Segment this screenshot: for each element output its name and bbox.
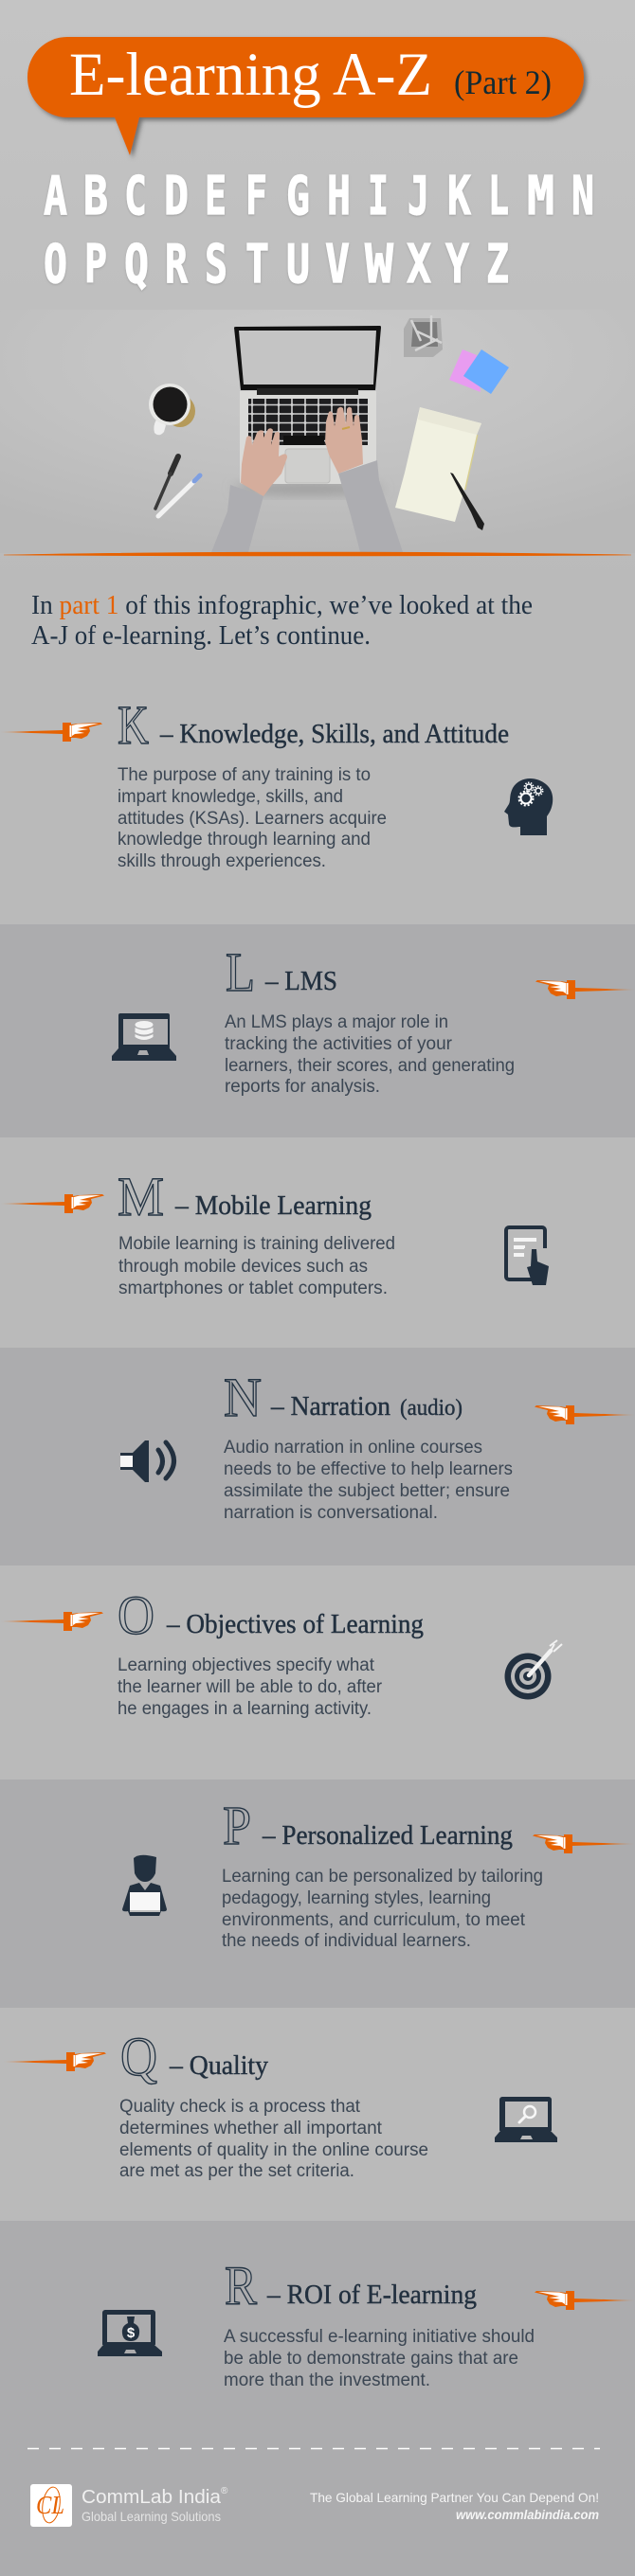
intro text: In part 1 of this infographic, we’ve looked at the xyxy=(31,591,533,620)
alphabet rows: R xyxy=(165,234,188,295)
tagline and url: www.commlabindia.com xyxy=(456,2507,599,2522)
body text: impart knowledge, skills, and xyxy=(118,787,343,807)
company name xyxy=(82,2486,228,2524)
body text xyxy=(118,1655,383,1719)
heading xyxy=(120,2026,268,2087)
body text: Quality check is a process that xyxy=(119,2097,361,2117)
heading xyxy=(118,1166,372,1227)
alphabet rows: M xyxy=(527,166,554,227)
alphabet rows: C xyxy=(124,166,147,227)
heading xyxy=(118,1584,424,1646)
alphabet rows: F xyxy=(245,166,267,227)
tagline and url: The Global Learning Partner You Can Depend On! xyxy=(310,2490,599,2505)
body text: reports for analysis. xyxy=(225,1077,380,1097)
company name: Global Learning Solutions xyxy=(82,2509,221,2524)
alphabet rows: D xyxy=(164,166,189,227)
heading: – ROI of E-learning xyxy=(266,2281,477,2310)
body text: are met as per the set criteria. xyxy=(119,2161,354,2181)
heading xyxy=(225,2255,477,2317)
body text: tracking the activities of your xyxy=(225,1034,453,1054)
heading: – Narration xyxy=(270,1392,390,1422)
page background xyxy=(0,0,635,925)
alphabet rows: A xyxy=(44,166,67,227)
panel: Q Quality xyxy=(0,2008,635,2221)
heading: M xyxy=(118,1166,164,1227)
icon: notepad and pen xyxy=(395,407,484,530)
heading: (audio) xyxy=(400,1396,463,1421)
arrow pointer xyxy=(3,2052,106,2071)
icon: laptop with money bag: $ xyxy=(127,2325,136,2341)
alphabet rows: E xyxy=(205,166,227,227)
arrow pointer xyxy=(0,723,102,742)
panel: N Narration xyxy=(0,1348,635,1565)
heading: L xyxy=(226,941,255,1003)
icon: coffee cup xyxy=(149,384,195,435)
body text: elements of quality in the online course xyxy=(119,2140,428,2160)
logo mark xyxy=(30,2484,72,2527)
heading: – Knowledge, Skills, and Attitude xyxy=(159,720,509,749)
body text xyxy=(222,1867,543,1951)
body text: An LMS plays a major role in xyxy=(225,1012,448,1032)
body text: narration is conversational. xyxy=(224,1503,438,1523)
body text: Learning can be personalized by tailoring xyxy=(222,1867,543,1887)
hero photo: laptop on a desk xyxy=(0,310,635,553)
orange divider under photo xyxy=(4,552,631,556)
body text: determines whether all important xyxy=(119,2119,383,2138)
body text: knowledge through learning and xyxy=(118,830,371,850)
body text: environments, and curriculum, to meet xyxy=(222,1910,526,1930)
bubble shape xyxy=(27,37,584,155)
panel: K Knowledge xyxy=(0,653,635,924)
company name: CommLab India xyxy=(82,2487,222,2508)
alphabet rows: Q xyxy=(124,234,149,295)
part 2 label: (Part 2) xyxy=(454,63,552,101)
alphabet rows: I xyxy=(368,166,389,227)
alphabet rows: H xyxy=(327,166,351,227)
icon: target with arrow xyxy=(504,1640,562,1699)
heading xyxy=(118,694,509,756)
arrow pointer xyxy=(535,1405,635,1424)
alphabet rows: O xyxy=(44,234,67,295)
footer xyxy=(27,2449,600,2527)
icon: pens xyxy=(155,456,200,516)
alphabet rows: N xyxy=(572,166,594,227)
body text: be able to demonstrate gains that are xyxy=(224,2349,518,2369)
heading: – Quality xyxy=(169,2051,268,2081)
alphabet rows: S xyxy=(205,234,227,295)
heading: R xyxy=(225,2255,257,2317)
body text: learners, their scores, and generating xyxy=(225,1056,515,1076)
alphabet rows: W xyxy=(365,234,393,295)
alphabet rows: U xyxy=(286,234,310,295)
body text: more than the investment. xyxy=(224,2370,430,2390)
alphabet rows: Z xyxy=(486,234,509,295)
header: title speech bubble xyxy=(27,37,584,155)
heading: N xyxy=(224,1367,262,1428)
alphabet rows: B xyxy=(83,166,108,227)
heading: Q xyxy=(120,2026,157,2087)
arrow pointer xyxy=(535,980,635,999)
arrow pointer xyxy=(533,1834,635,1853)
heading xyxy=(223,1795,513,1856)
company name: ® xyxy=(221,2486,228,2496)
heading: – LMS xyxy=(264,967,337,996)
arrow pointer xyxy=(535,2291,635,2310)
icon: hands and sleeves xyxy=(211,407,403,552)
icon: laptop with database xyxy=(112,1013,176,1061)
alphabet rows: K xyxy=(447,166,471,227)
body text xyxy=(224,2327,535,2390)
icon: tablet with finger xyxy=(506,1227,549,1285)
title text: E-learning A-Z xyxy=(69,41,432,109)
body text xyxy=(224,1438,513,1523)
heading: O xyxy=(118,1584,154,1646)
body text xyxy=(119,2097,428,2181)
arrow pointer xyxy=(0,1612,103,1631)
body text: assimilate the subject better; ensure xyxy=(224,1481,510,1501)
arrow pointer xyxy=(0,1194,104,1213)
body text: Learning objectives specify what xyxy=(118,1655,375,1675)
alphabet rows: X xyxy=(407,234,431,295)
body text: attitudes (KSAs). Learners acquire xyxy=(118,809,387,829)
heading: K xyxy=(118,694,149,756)
body text: the learner will be able to do, after xyxy=(118,1677,383,1697)
icon: laptop xyxy=(232,326,384,494)
body text xyxy=(118,1234,395,1298)
body text: pedagogy, learning styles, learning xyxy=(222,1888,491,1908)
heading: P xyxy=(223,1795,251,1856)
alphabet rows xyxy=(44,166,594,295)
body text: he engages in a learning activity. xyxy=(118,1699,372,1719)
body text xyxy=(225,1012,515,1097)
panel: P Personalized Learning xyxy=(0,1780,635,2008)
body text: The purpose of any training is to xyxy=(118,765,371,785)
icon: sticky notes xyxy=(449,349,509,394)
panel: R ROI xyxy=(0,2221,635,2576)
intro text: A-J of e-learning. Let’s continue. xyxy=(31,621,371,651)
heading xyxy=(226,941,337,1003)
alphabet rows: L xyxy=(488,166,509,227)
intro text xyxy=(31,591,533,651)
icon: laptop with magnifier xyxy=(495,2097,557,2142)
tagline and url xyxy=(310,2490,599,2522)
logo mark: CL xyxy=(36,2491,64,2519)
alphabet rows: T xyxy=(245,234,269,295)
alphabet rows: V xyxy=(325,234,350,295)
heading: – Mobile Learning xyxy=(174,1191,372,1221)
heading xyxy=(224,1367,463,1428)
body text: smartphones or tablet computers. xyxy=(118,1279,388,1298)
panel: O Objectives xyxy=(0,1565,635,1780)
body text: A successful e-learning initiative should xyxy=(224,2327,535,2347)
body text: skills through experiences. xyxy=(118,851,326,871)
alphabet rows: P xyxy=(84,234,107,295)
body text: Audio narration in online courses xyxy=(224,1438,482,1458)
panel: L LMS xyxy=(0,924,635,1137)
heading: – Personalized Learning xyxy=(262,1821,513,1851)
body text: through mobile devices such as xyxy=(118,1257,368,1277)
alphabet rows: G xyxy=(286,166,310,227)
alphabet rows: J xyxy=(408,166,429,227)
body text: the needs of individual learners. xyxy=(222,1931,471,1951)
body text: Mobile learning is training delivered xyxy=(118,1234,395,1254)
body text: needs to be effective to help learners xyxy=(224,1459,513,1479)
icon: person with laptop xyxy=(122,1855,167,1916)
icon: pencil holder xyxy=(404,315,443,357)
icon: laptop with money bag xyxy=(98,2310,162,2356)
panel: M Mobile Learning xyxy=(0,1137,635,1348)
icon: head with gears xyxy=(504,778,553,835)
body text xyxy=(118,765,387,871)
icon: speaker xyxy=(120,1440,174,1482)
alphabet rows: Y xyxy=(445,234,469,295)
heading: – Objectives of Learning xyxy=(166,1610,424,1639)
